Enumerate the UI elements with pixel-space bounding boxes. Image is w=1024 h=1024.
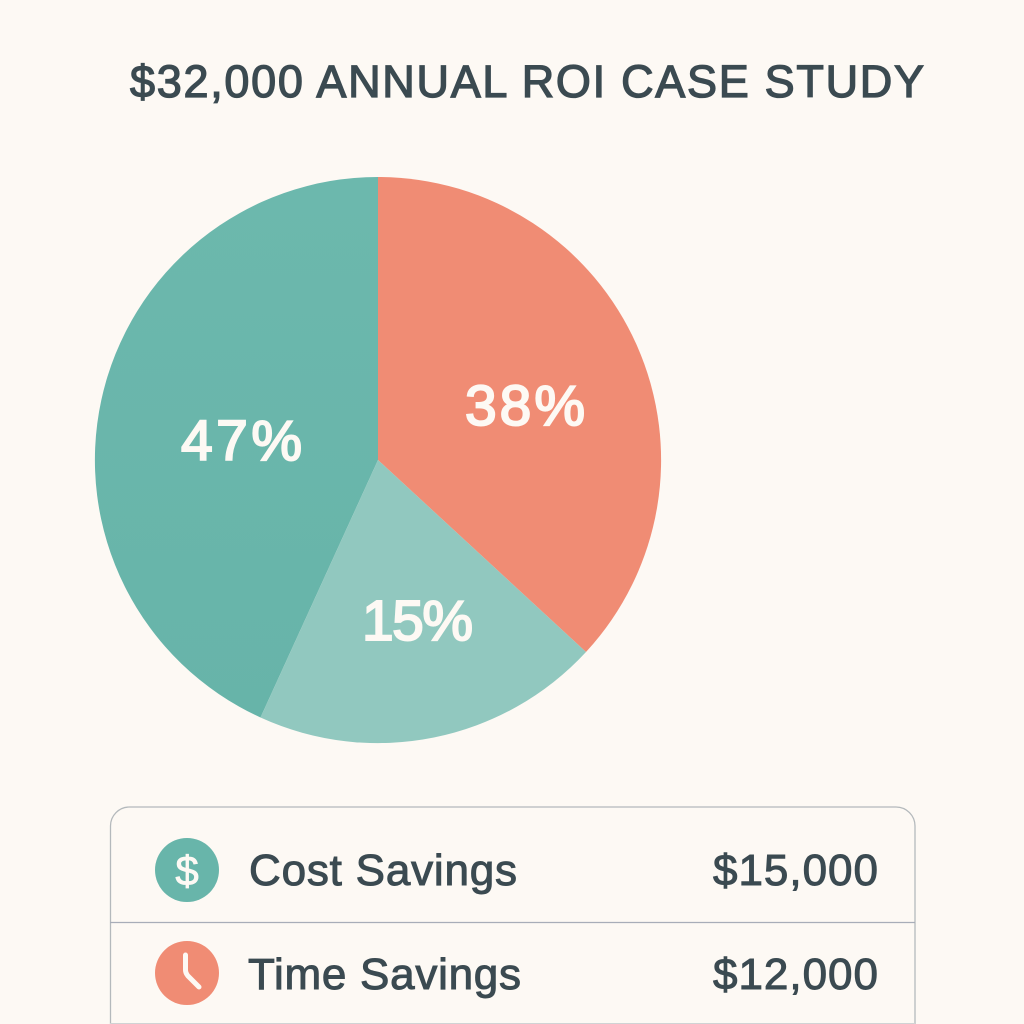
title: $32,000 ANNUAL ROI CASE STUDY [130, 56, 924, 107]
row: time savings [155, 941, 878, 1005]
icon: dollar [155, 838, 219, 902]
slice: 15% light teal [260, 460, 586, 743]
pie chart [95, 177, 661, 743]
value: $12,000: $12,000 [713, 950, 878, 999]
slice: 47% teal [95, 177, 378, 717]
label: cost savings: Cost Savings [249, 846, 517, 895]
row: cost savings [155, 838, 878, 902]
label: 47%: 47% [181, 409, 302, 473]
label: time savings: Time Savings [248, 950, 521, 999]
slice: 38% coral [378, 177, 661, 652]
label: 15%: 15% [362, 589, 473, 653]
icon: dollar: $ [175, 847, 199, 894]
label: 38%: 38% [465, 374, 585, 438]
table panel [110, 807, 915, 1024]
value: $15,000: $15,000 [713, 846, 878, 895]
icon: clock [155, 941, 219, 1005]
